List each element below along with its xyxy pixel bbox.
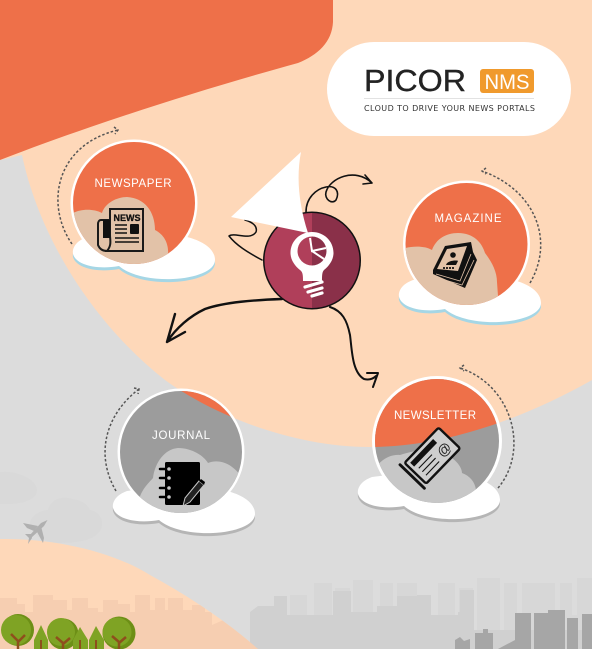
panel: newspaper (58, 127, 215, 282)
background clouds (0, 472, 102, 543)
icon: newspaper: NEWS (114, 213, 140, 223)
circle badge (118, 388, 244, 516)
icon: magazine stack (433, 242, 477, 288)
cloud: faint centre (30, 498, 102, 543)
skyline: far buildings (290, 578, 592, 649)
hand-drawn arrows (167, 175, 378, 387)
logo wordmark: PICOR (364, 63, 466, 98)
inner cloud (140, 448, 238, 513)
icon: notebook and pencil (160, 462, 205, 506)
skyline: far buildings on peach (0, 595, 258, 649)
dashed arrow (482, 168, 541, 283)
dashed arrow (460, 365, 514, 488)
skyline: near dark buildings (455, 610, 592, 649)
dashed arrow (58, 127, 118, 244)
tree (34, 625, 48, 649)
cloud base (358, 475, 500, 522)
inner cloud (406, 233, 498, 305)
dashed arrow (105, 388, 139, 491)
inner cloud (380, 451, 476, 503)
pointer triangle (231, 152, 308, 233)
orange corner banner (0, 0, 333, 160)
icon: newsletter card (400, 426, 462, 488)
cloud base (113, 489, 255, 536)
label: NEWSLETTER (394, 410, 476, 422)
logo panel (327, 42, 571, 136)
circle badge (403, 180, 530, 308)
trees (1, 614, 136, 649)
tree (89, 626, 104, 649)
circle badge (70, 140, 198, 266)
panel: journal (104, 387, 255, 536)
tagline: CLOUD TO DRIVE YOUR NEWS PORTALS (364, 104, 535, 113)
tree (1, 614, 34, 649)
icon: newsletter card: @ (433, 439, 455, 460)
tree (47, 618, 78, 649)
circle badge (372, 376, 502, 506)
arrow: to newspaper (229, 220, 262, 260)
label: JOURNAL (152, 430, 211, 442)
logo badge: NMS (484, 71, 530, 94)
peach foreground hill (0, 539, 258, 649)
arrow: to magazine (306, 175, 372, 212)
hub circle with bulb (263, 212, 361, 310)
label: NEWSPAPER (94, 178, 172, 190)
icon: newspaper (98, 209, 143, 251)
panel: newsletter (358, 364, 515, 522)
panel: magazine (399, 168, 541, 325)
arrow: to journal (167, 299, 282, 342)
cloud base (399, 278, 541, 325)
label: MAGAZINE (434, 213, 502, 225)
inner cloud (74, 197, 168, 264)
peach backdrop shape (0, 0, 592, 447)
tree (73, 627, 88, 649)
cloud base (73, 235, 215, 282)
skyline: mid buildings (250, 590, 592, 649)
icon: plane (23, 520, 48, 544)
cloud: faint left (0, 472, 37, 504)
tree (102, 616, 136, 649)
icon: light bulb with pie (290, 232, 334, 296)
arrow: to newsletter (330, 307, 378, 387)
